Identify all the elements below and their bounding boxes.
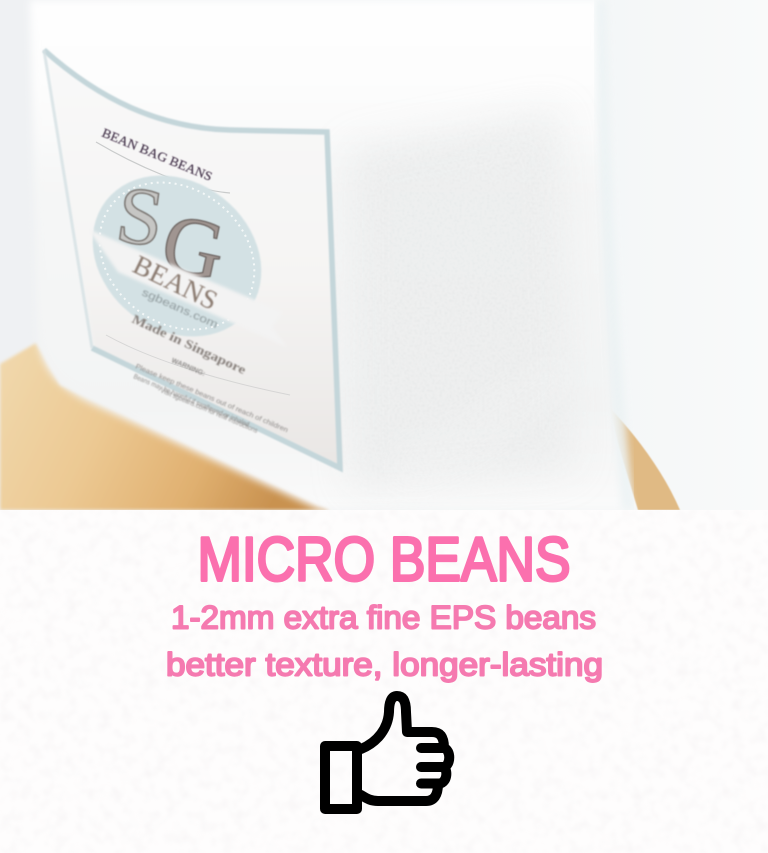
- warning text: WARNING:: [170, 357, 206, 378]
- subtitle line 1: 1-2mm extra fine EPS beans: [171, 600, 596, 636]
- warning text: Please keep these beans out of reach of children: [134, 363, 289, 434]
- label heading: BEAN BAG BEANS: [100, 126, 214, 184]
- product label: [44, 50, 342, 468]
- warning text: Visit sgbeans.com for refill instructions: [159, 387, 259, 435]
- made in singapore: Made in Singapore: [130, 311, 249, 377]
- subtitle line 2: better texture, longer-lasting: [166, 646, 603, 682]
- title: MICRO BEANS: [198, 526, 570, 594]
- warning text: Beans may be harmful if swallowed or inhaled: [132, 373, 250, 429]
- wooden table right: [614, 414, 680, 510]
- logo badge: [92, 175, 262, 337]
- logo badge: S: [111, 168, 169, 264]
- panel: product photo: [0, 0, 768, 510]
- bean bag: [30, 0, 640, 510]
- logo badge: sgbeans.com: [140, 287, 220, 331]
- panel: textured bean background: [0, 510, 768, 853]
- icon: thumbs up: [325, 696, 449, 809]
- logo badge: BEANS: [128, 249, 222, 316]
- logo badge: G: [154, 196, 233, 299]
- photo backdrop: [0, 0, 768, 510]
- wooden table left: [0, 343, 330, 510]
